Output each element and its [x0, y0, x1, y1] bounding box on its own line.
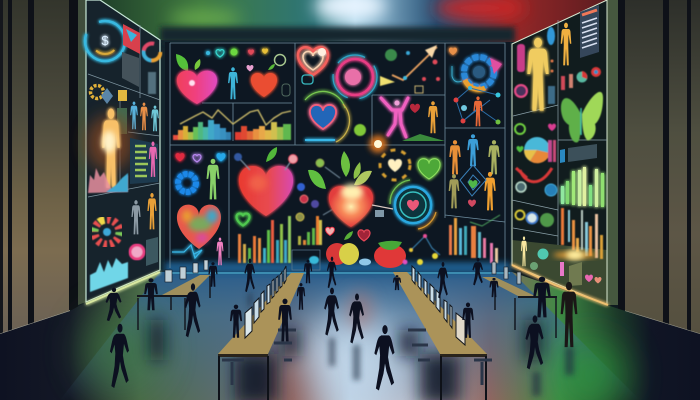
sun heart	[380, 150, 410, 180]
lower area chart	[90, 258, 128, 292]
rising arrow	[380, 45, 437, 86]
constellation	[402, 234, 440, 265]
three small hearts	[175, 153, 226, 162]
pie with arc	[516, 124, 556, 182]
seated further	[297, 283, 305, 310]
green chip heart	[236, 213, 250, 226]
node network with person	[454, 86, 500, 126]
left corridor wall	[0, 0, 86, 334]
right side table with workstations	[482, 262, 557, 338]
stools and chairs	[408, 330, 492, 385]
red apple heart	[246, 64, 277, 97]
runner left front	[110, 324, 129, 388]
team figures	[449, 134, 500, 210]
stools and chairs	[222, 330, 296, 385]
pink figure	[149, 142, 157, 177]
grid lines	[88, 25, 160, 197]
runner right front	[525, 315, 544, 369]
document with lines	[580, 5, 599, 58]
fruit: apple pair	[326, 231, 359, 265]
donut chart	[144, 44, 160, 94]
walker mid left	[185, 283, 200, 337]
grid lines	[512, 20, 607, 245]
blue person	[228, 67, 238, 99]
green bar chart	[561, 167, 604, 207]
notes block	[146, 237, 158, 266]
green heart	[418, 159, 440, 179]
speech icon	[302, 75, 313, 84]
silhouettes of people	[106, 257, 577, 390]
right front table with monitors	[393, 266, 492, 400]
orange bar chart	[561, 208, 603, 259]
lower bar chart centre	[238, 216, 322, 263]
glowing star	[369, 135, 387, 153]
grid lines	[170, 43, 505, 269]
seated at left table	[278, 299, 292, 341]
small icons row	[206, 48, 268, 57]
document block	[122, 52, 139, 87]
standing back	[304, 260, 312, 283]
seated right back	[393, 275, 401, 290]
seated mid right	[489, 278, 499, 297]
seated long hair	[230, 305, 242, 338]
teal ring	[390, 180, 436, 229]
glowing base line	[86, 272, 160, 304]
blurred runner upper	[327, 257, 336, 288]
mini pies	[561, 67, 601, 90]
heart icons	[325, 227, 335, 236]
large red heart	[239, 147, 293, 216]
line chart	[180, 110, 291, 125]
runner back left	[244, 259, 255, 292]
glowing base line	[512, 265, 608, 305]
connector nodes	[234, 153, 340, 221]
radial chart	[94, 220, 120, 244]
pink ring	[130, 245, 144, 259]
teal leaves	[308, 151, 372, 189]
heart with leaves	[176, 54, 217, 104]
glowing apple heart	[329, 184, 373, 227]
small cloud and squares	[359, 258, 371, 266]
pulse line	[172, 245, 202, 258]
neon heart outline	[298, 47, 328, 75]
ring icon	[274, 54, 286, 66]
connector bar	[372, 205, 393, 217]
ceiling light band	[100, 0, 610, 43]
pink figure small	[217, 237, 223, 265]
ringed heart	[305, 91, 349, 142]
seated on right table	[462, 303, 474, 338]
dial chart with dollar sign	[85, 21, 125, 61]
red heart and orange person	[410, 104, 420, 113]
figure area chart	[88, 168, 128, 193]
glowing main figure	[86, 109, 134, 188]
right corridor wall	[607, 0, 700, 334]
main runner	[374, 325, 394, 390]
panel: right wall display	[512, 0, 608, 305]
dim figure badge	[282, 84, 290, 96]
floor shadows	[150, 320, 541, 400]
glowing figure and badge	[521, 236, 548, 270]
blue gear	[178, 174, 196, 192]
dial chart with dollar sign: $	[101, 33, 109, 48]
pink tags	[560, 262, 602, 286]
red card	[123, 24, 140, 54]
side icons	[515, 27, 555, 104]
gear network	[449, 48, 502, 89]
seated person left	[144, 278, 158, 310]
list panel	[130, 138, 158, 184]
two upper people	[131, 193, 157, 234]
woman jogger	[349, 294, 364, 344]
runner far left	[106, 288, 122, 321]
bar chart upper left	[173, 120, 231, 140]
pink dancer	[381, 98, 408, 137]
blurred runner lower	[324, 288, 339, 336]
flare	[553, 250, 597, 260]
seated right side	[533, 277, 551, 317]
monitors	[245, 266, 286, 338]
left side table with workstations	[137, 260, 210, 330]
seated back left	[208, 262, 218, 287]
green hill	[402, 134, 445, 141]
left front table with monitors	[218, 266, 304, 400]
mosaic heart	[177, 205, 221, 249]
label block	[560, 144, 597, 163]
small orange person	[561, 23, 571, 65]
gear icon	[90, 86, 104, 98]
floor	[0, 272, 700, 400]
runner far back right	[472, 258, 483, 285]
green person	[207, 159, 219, 199]
big yellow person	[527, 38, 549, 111]
diamond icon	[101, 88, 113, 104]
green pill	[354, 124, 366, 136]
monitors	[412, 266, 465, 345]
standing man right	[561, 282, 577, 347]
target ring	[333, 55, 377, 99]
side badges	[515, 124, 557, 227]
three small people	[130, 101, 159, 131]
runner back right	[437, 262, 448, 299]
panel: left wall display	[85, 0, 160, 304]
bars lower right	[449, 215, 500, 263]
green butterfly	[561, 92, 603, 143]
lower wash of blue	[165, 262, 510, 274]
reflections of runners	[248, 293, 574, 396]
scattered dots	[403, 51, 440, 93]
bar chart upper right	[235, 122, 291, 140]
fruit: red apple	[374, 241, 406, 268]
panel: centre wall display	[165, 42, 510, 274]
mini blocks	[118, 90, 127, 101]
